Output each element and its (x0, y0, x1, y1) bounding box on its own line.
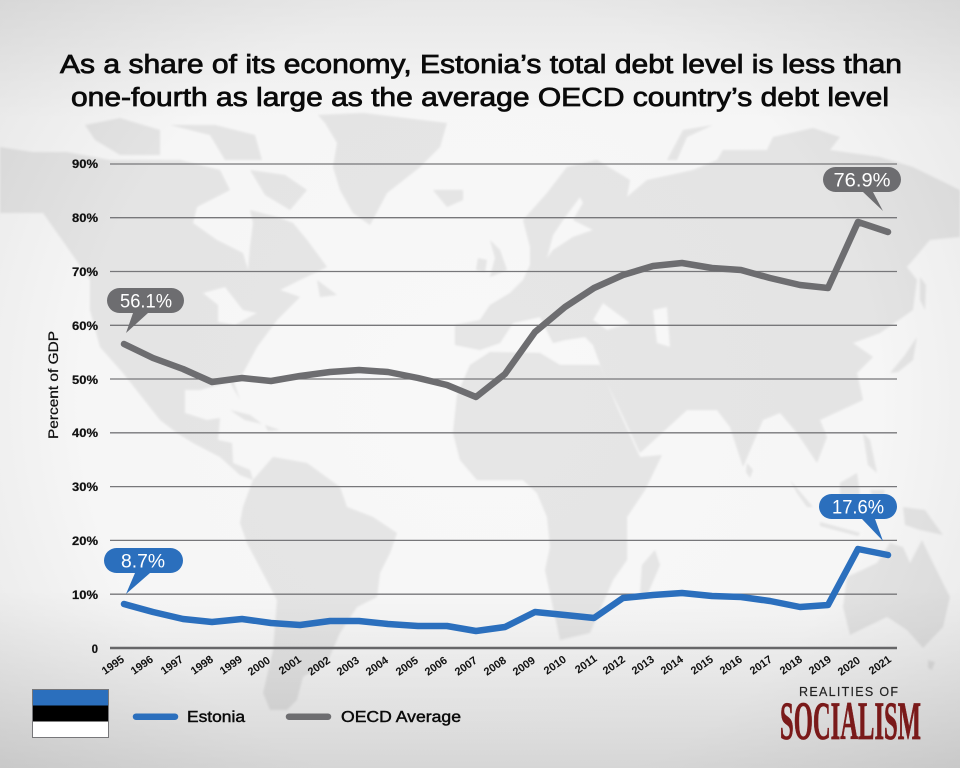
world map backdrop (0, 113, 960, 710)
callout: Estonia 1995 8.7% (104, 548, 183, 594)
x-axis year labels: 1997 (159, 654, 186, 677)
y-axis labels: 90% (72, 159, 98, 171)
chart gridlines (110, 164, 897, 648)
x-axis year labels: 2009 (511, 655, 538, 678)
Estonia line (124, 549, 888, 631)
x-axis year labels: 2014 (659, 653, 686, 677)
x-axis year labels: 2003 (335, 655, 362, 678)
y-axis labels: 30% (72, 482, 98, 494)
x-axis year labels: 2002 (306, 655, 333, 678)
y-axis labels: 60% (72, 321, 98, 333)
y-axis labels: 80% (72, 213, 98, 225)
y-axis labels: 50% (72, 375, 98, 387)
y-axis labels (72, 159, 98, 656)
callout: OECD 2021 76.9%: 76.9% (834, 170, 891, 192)
y-axis labels: 20% (72, 536, 98, 548)
callout: Estonia 2021 17.6%: 17.6% (832, 498, 884, 518)
legend: Estonia (187, 709, 245, 726)
x-axis year labels: 1996 (129, 654, 156, 677)
title: one-fourth as large as the average OECD country’s debt level (71, 84, 889, 112)
legend: OECD Average (341, 709, 461, 726)
icon: Estonian flag (32, 690, 108, 738)
x-axis year labels: 2015 (689, 654, 716, 677)
x-axis year labels: 1999 (218, 654, 245, 677)
x-axis year labels: 2007 (453, 655, 480, 678)
y-axis title: Percent of GDP (45, 331, 61, 439)
x-axis year labels: 2005 (394, 655, 421, 678)
x-axis year labels: 2008 (482, 655, 509, 678)
callout: Estonia 2021 17.6% (819, 494, 897, 541)
y-axis labels: 70% (72, 267, 98, 279)
callout: OECD 2021 76.9% (823, 167, 901, 211)
callout: Estonia 1995 8.7%: 8.7% (121, 552, 165, 572)
x-axis year labels: 2004 (364, 654, 391, 678)
x-axis year labels: 2021 (867, 654, 894, 677)
OECD average line (124, 222, 888, 397)
x-axis year labels: 2016 (718, 654, 745, 677)
x-axis year labels: 2006 (423, 655, 450, 678)
title (60, 51, 902, 112)
callout: OECD 1995 56.1% (107, 288, 184, 333)
title: As a share of its economy, Estonia’s total debt level is less than (60, 51, 902, 79)
x-axis year labels: 2018 (778, 654, 805, 677)
x-axis year labels: 2001 (277, 654, 304, 677)
y-axis labels: 0 (92, 644, 98, 656)
x-axis year labels: 2012 (601, 654, 628, 677)
y-axis labels: 10% (72, 590, 98, 602)
x-axis year labels: 1998 (189, 654, 216, 677)
logo: Realities of Socialism: REALITIES OF (799, 685, 898, 699)
legend (136, 709, 461, 726)
x-axis year labels: 2010 (542, 654, 569, 677)
callout: OECD 1995 56.1%: 56.1% (120, 292, 172, 312)
y-axis labels: 40% (72, 428, 98, 440)
x-axis year labels (100, 653, 894, 678)
x-axis year labels: 1995 (100, 654, 127, 677)
x-axis year labels: 2000 (246, 655, 273, 678)
x-axis year labels: 2017 (748, 654, 775, 677)
x-axis year labels: 2020 (836, 655, 863, 678)
x-axis year labels: 2019 (807, 654, 834, 677)
x-axis year labels: 2011 (573, 653, 599, 676)
x-axis year labels: 2013 (630, 654, 657, 677)
